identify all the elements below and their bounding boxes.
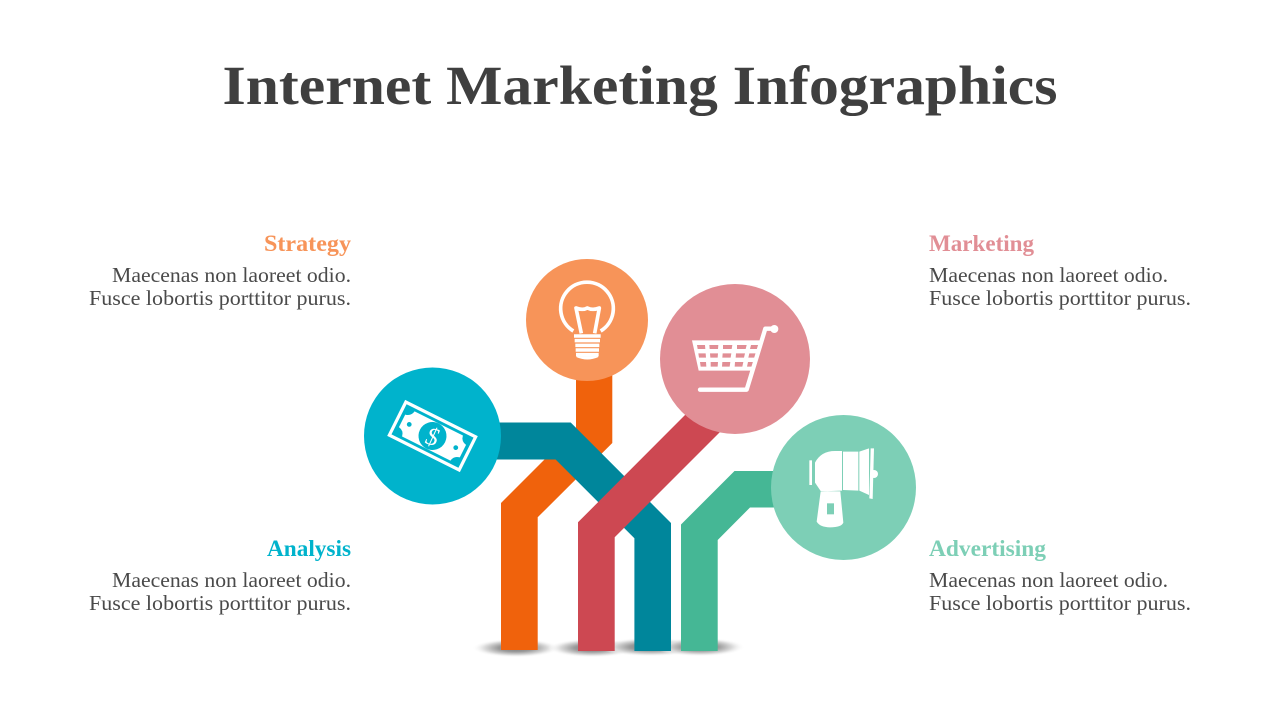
heading: marketing: Marketing: [929, 231, 1034, 256]
body: advertising: [929, 568, 1191, 615]
body: analysis: Maecenas non laoreet odio.: [112, 568, 351, 592]
body: analysis: Fusce lobortis porttitor purus.: [89, 591, 351, 615]
ground shadows: [472, 638, 745, 658]
panel: strategy text: [89, 231, 352, 310]
body: marketing: [929, 263, 1191, 310]
icon: megaphone: [809, 448, 878, 527]
stem: green: [681, 471, 800, 651]
body: strategy: Fusce lobortis porttitor purus.: [89, 286, 351, 310]
heading: advertising: Advertising: [929, 536, 1047, 561]
heading: strategy: Strategy: [264, 231, 352, 256]
title: Internet Marketing Infographics: [222, 55, 1058, 116]
stem: red: [578, 410, 730, 651]
icon: shopping cart: [692, 325, 778, 390]
node: marketing circle with cart: [660, 284, 810, 434]
body: analysis: [89, 568, 351, 615]
body: advertising: Fusce lobortis porttitor purus.: [929, 591, 1191, 615]
stem: teal: [480, 422, 671, 651]
body: strategy: Maecenas non laoreet odio.: [112, 263, 351, 287]
panel: marketing text: [929, 231, 1191, 310]
body: marketing: Fusce lobortis porttitor purus.: [929, 286, 1191, 310]
icon: light bulb: [561, 282, 613, 359]
panel: advertising text: [929, 536, 1191, 615]
body: marketing: Maecenas non laoreet odio.: [929, 263, 1168, 287]
stem: orange: [501, 370, 612, 650]
node: advertising circle with megaphone: [771, 415, 916, 560]
body: strategy: [89, 263, 351, 310]
panel: analysis text: [89, 536, 351, 615]
node: analysis circle with banknote: [364, 368, 501, 504]
body: advertising: Maecenas non laoreet odio.: [929, 568, 1168, 592]
node: strategy circle with bulb: [526, 259, 648, 381]
icon: banknote: $: [423, 423, 442, 452]
heading: analysis: Analysis: [267, 536, 351, 561]
